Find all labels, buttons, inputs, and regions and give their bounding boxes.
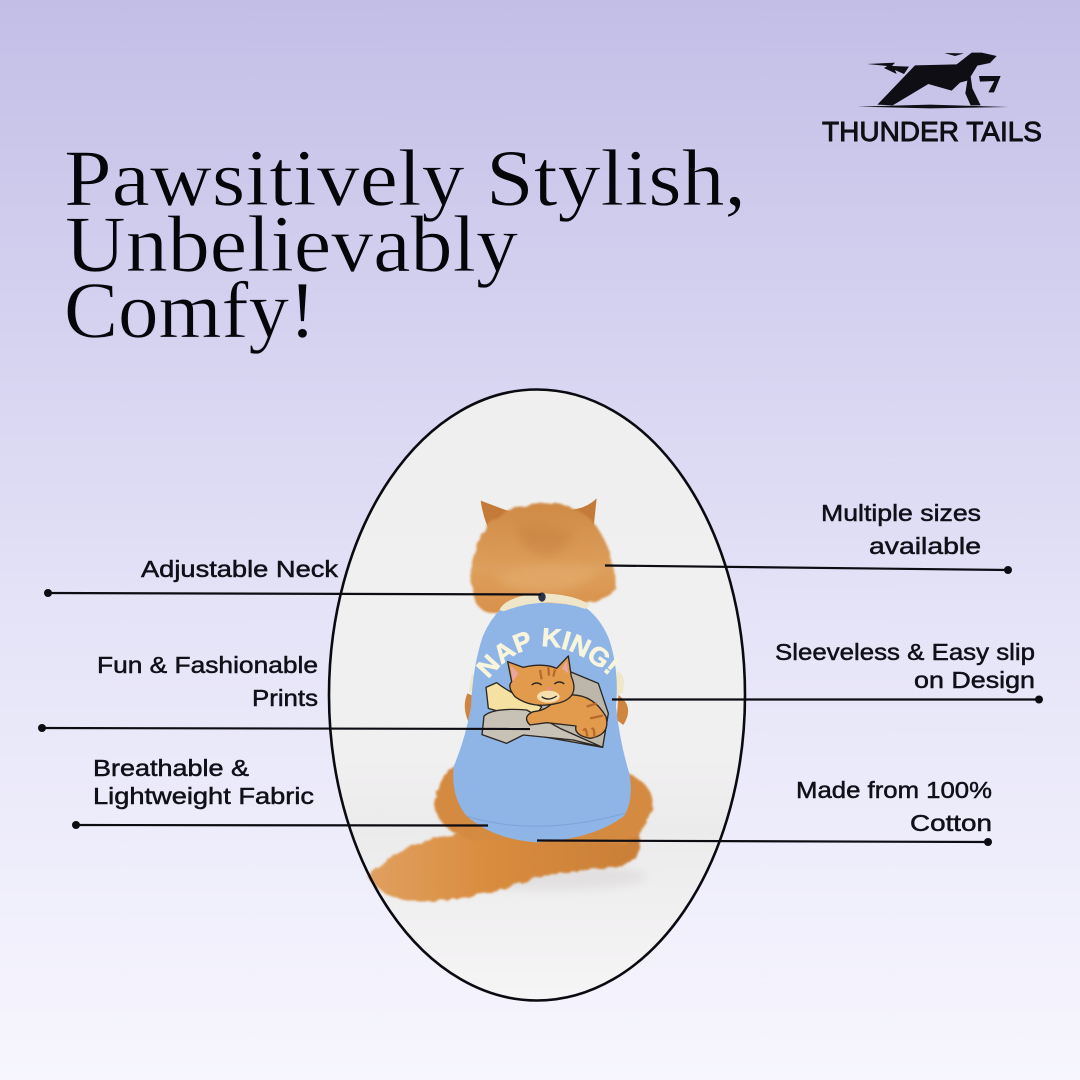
title: Comfy! bbox=[64, 267, 316, 355]
left ear bbox=[481, 501, 510, 535]
cat tail bbox=[367, 833, 640, 902]
label: sleeveless: Sleeveless & Easy slip bbox=[775, 639, 1035, 665]
title: Unbelievably bbox=[65, 201, 518, 289]
label: multiple sizes: available bbox=[869, 533, 981, 559]
label: fun and fashionable prints: Prints bbox=[252, 685, 318, 711]
floor shadow bbox=[447, 863, 647, 890]
label: breathable fabric: Lightweight Fabric bbox=[93, 783, 314, 809]
label: cotton bbox=[796, 777, 992, 836]
logo icon: running dog with lightning bbox=[857, 53, 1008, 108]
logo wordmark: THUNDER TAILS bbox=[822, 116, 1042, 147]
cat head and ruff bbox=[471, 498, 615, 613]
label: adjustable neck: Adjustable Neck bbox=[141, 556, 339, 582]
photo: cat wearing blue shirt bbox=[327, 458, 692, 942]
line: cotton bbox=[537, 838, 992, 846]
cream collar bbox=[499, 593, 590, 611]
shirt print: NAP KING!: NAP KING! bbox=[476, 628, 619, 678]
head fur bbox=[471, 503, 615, 613]
label: sleeveless: on Design bbox=[914, 667, 1035, 693]
label: fun and fashionable prints bbox=[97, 652, 318, 711]
label: multiple sizes: Multiple sizes bbox=[821, 500, 981, 526]
title: Pawsitively Stylish, bbox=[64, 135, 746, 223]
line: prints bbox=[38, 724, 530, 732]
title bbox=[64, 135, 746, 355]
blue shirt bbox=[453, 603, 631, 842]
label: multiple sizes bbox=[821, 500, 981, 559]
cat haunches bbox=[435, 765, 652, 843]
line: fabric bbox=[72, 821, 488, 829]
label: cotton: Cotton bbox=[910, 810, 992, 836]
oval outline bbox=[329, 390, 745, 1000]
line: sleeveless bbox=[612, 696, 1043, 704]
neck toggle bbox=[538, 592, 546, 602]
label: fun and fashionable prints: Fun & Fashionable bbox=[97, 652, 318, 678]
label: cotton: Made from 100% bbox=[796, 777, 992, 803]
line: multiple sizes bbox=[605, 566, 1012, 574]
line: adjustable neck bbox=[44, 589, 541, 597]
label: breathable fabric bbox=[93, 755, 314, 809]
shirt print: sleeping kitten bbox=[508, 656, 607, 738]
label: sleeveless bbox=[775, 639, 1035, 693]
label: breathable fabric: Breathable & bbox=[93, 755, 249, 781]
shirt side straps bbox=[469, 671, 624, 697]
callout lines bbox=[38, 566, 1043, 846]
right ear bbox=[570, 498, 597, 530]
logo: Thunder Tails bbox=[822, 53, 1042, 147]
shirt print: pillows bbox=[482, 672, 608, 747]
photo oval background bbox=[330, 390, 744, 1000]
